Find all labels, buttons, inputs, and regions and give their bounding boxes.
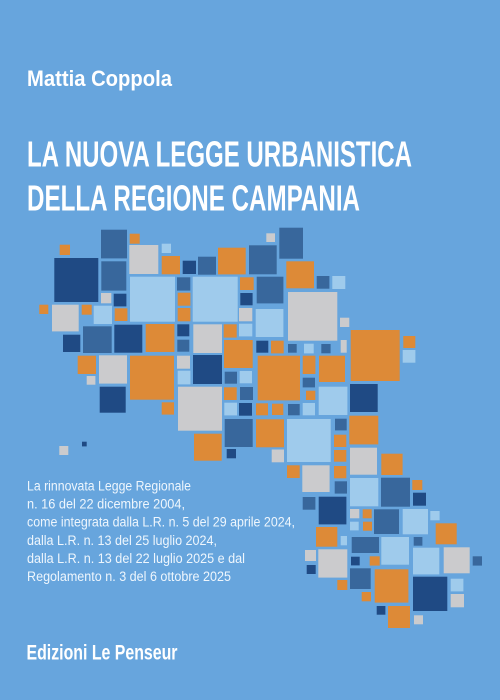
subtitle text block: Regolamento n. 3 del 6 ottobre 2025 bbox=[27, 569, 231, 584]
title bbox=[27, 134, 412, 219]
subtitle text block: dalla L.R. n. 13 del 25 luglio 2024, bbox=[27, 533, 217, 548]
mosaic map of Campania made of squares bbox=[39, 228, 482, 628]
subtitle text block: come integrata dalla L.R. n. 5 del 29 aprile 2024, bbox=[27, 515, 295, 530]
subtitle text block: dalla L.R. n. 13 del 22 luglio 2025 e dal bbox=[27, 551, 245, 566]
author name: Mattia Coppola bbox=[27, 66, 173, 91]
subtitle text block: n. 16 del 22 dicembre 2004, bbox=[27, 496, 185, 512]
subtitle text block bbox=[27, 478, 295, 584]
subtitle text block: La rinnovata Legge Regionale bbox=[27, 478, 191, 493]
publisher: Edizioni Le Penseur bbox=[26, 641, 178, 664]
